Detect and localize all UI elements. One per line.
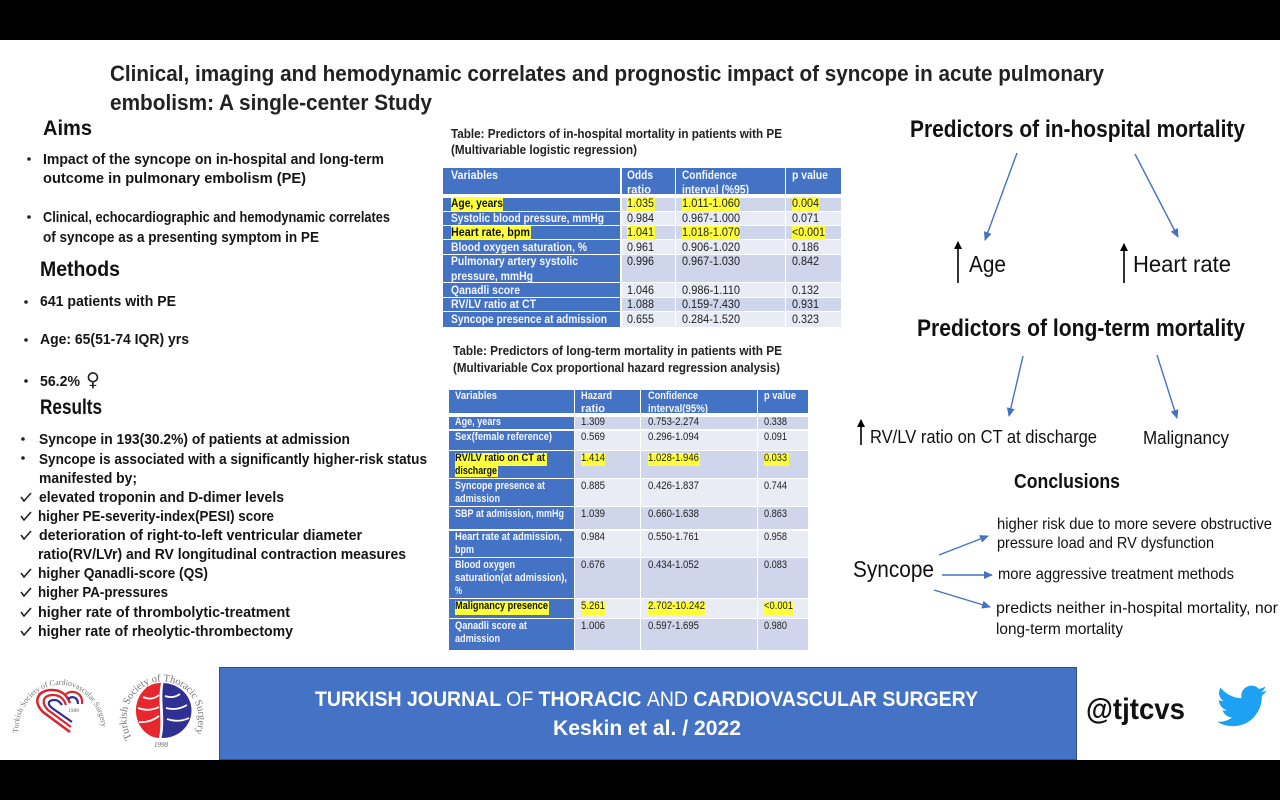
- aims bullets: Impact of the syncope on in-hospital and long-term: [43, 151, 384, 168]
- table 1 variable column: Qanadli score: [451, 283, 520, 297]
- table 2 variable column: Syncope presence at: [455, 480, 545, 492]
- table 2 variable column: saturation(at admission),: [455, 572, 567, 584]
- results checklist: elevated troponin and D-dimer levels: [39, 489, 284, 506]
- results checklist: ratio(RV/LVr) and RV longitudinal contraction measures: [38, 546, 406, 563]
- table 1 values: 1.041: [627, 225, 654, 239]
- table 2 values: 1.039: [581, 508, 605, 520]
- table 2 values: 0.660-1.638: [648, 508, 699, 520]
- results checklist: [21, 489, 406, 640]
- label: heart rate: Heart rate: [1133, 251, 1231, 277]
- table 2 values: 0.597-1.695: [648, 620, 699, 632]
- table 1 variable column: Systolic blood pressure, mmHg: [451, 211, 604, 225]
- table 2 values: 0.083: [764, 559, 787, 571]
- heading: long-term predictors: Predictors of long-term mortality: [917, 315, 1246, 342]
- panel: methods: [24, 258, 189, 391]
- journal name: TURKISH JOURNAL OF THORACIC AND CARDIOVASCULAR SURGERY: [315, 688, 978, 711]
- panel: predictors of long-term mortality: [861, 315, 1246, 448]
- table 2 values: 1.309: [581, 416, 605, 428]
- table 1 header row: interval (%95): [682, 182, 749, 196]
- table 1 values: 0.159-7.430: [682, 297, 740, 311]
- table: in-hospital mortality: [443, 168, 841, 327]
- table 2 variable column: discharge: [455, 465, 497, 477]
- table 1 variable column: Age, years: [451, 196, 503, 210]
- table caption: long-term mortality: [453, 344, 782, 375]
- table 2 values: 0.980: [764, 620, 787, 632]
- table 2 values: 0.338: [764, 416, 787, 428]
- title: Clinical, imaging and hemodynamic correlates and prognostic impact of syncope in acute pulmonary: [110, 61, 1105, 86]
- table 2 variable column: %: [455, 585, 462, 597]
- arrow: higher risk: [939, 536, 988, 555]
- arrow: aggressive treatment: [942, 574, 992, 576]
- table 2 values: [581, 416, 793, 632]
- table 2 variable column: Malignancy presence: [455, 600, 548, 612]
- table 2 values: 0.569: [581, 431, 605, 443]
- table 1 values: <0.001: [792, 225, 825, 239]
- aims bullets: [27, 151, 390, 246]
- table 2 header row: Variables: [455, 390, 497, 402]
- table 2 values: 0.984: [581, 531, 605, 543]
- table 2 values: 1.006: [581, 620, 605, 632]
- panel: predictors of in-hospital mortality: [910, 116, 1246, 283]
- table 1 values: 0.284-1.520: [682, 312, 740, 326]
- table caption: in-hospital mortality: [451, 127, 782, 157]
- logo: Turkish Society of Thoracic Surgery: Turkish Society of Thoracic Surgery: [120, 674, 204, 742]
- heading: results: Results: [40, 396, 102, 419]
- table caption: in-hospital mortality: (Multivariable logistic regression): [451, 143, 637, 157]
- table 2 values: 1.028-1.946: [648, 452, 699, 464]
- footer banner: [220, 668, 1076, 760]
- table 2 variable column: Sex(female reference): [455, 431, 552, 443]
- table 1 values: 1.046: [627, 283, 654, 297]
- table 2 variable column: Age, years: [455, 416, 501, 428]
- arrow: to rv/lv ratio: [1009, 356, 1023, 416]
- conclusion: no mortality prediction: long-term mortality: [996, 621, 1123, 638]
- panel: aims: [27, 117, 390, 246]
- up arrow: heart rate: [1123, 244, 1125, 283]
- table caption: long-term mortality: (Multivariable Cox proportional hazard regression analysis): [453, 361, 780, 375]
- up arrow: age: [957, 242, 959, 283]
- panel: conclusions: [853, 471, 1279, 638]
- table 2 header row: Confidence: [648, 390, 698, 402]
- conclusion: higher risk: pressure load and RV dysfunction: [997, 535, 1214, 552]
- table 2 values: 1.414: [581, 452, 605, 464]
- logo: Turkish Society of Cardiovascular Surgery: Turkish Society of Cardiovascular Surgery: [12, 679, 106, 733]
- table 2 values: 0.885: [581, 480, 605, 492]
- table 1 values: 1.011-1.060: [682, 196, 740, 210]
- table 2 values: 0.753-2.274: [648, 416, 699, 428]
- table 1 values: 0.961: [627, 240, 654, 254]
- table 2 values: 0.426-1.837: [648, 480, 699, 492]
- methods bullets: 56.2%: [40, 373, 80, 390]
- table 1 variable column: Blood oxygen saturation, %: [451, 240, 587, 254]
- results checklist: higher PE-severity-index(PESI) score: [38, 508, 274, 525]
- table 2 values: <0.001: [764, 600, 793, 612]
- table 1 variable column: RV/LV ratio at CT: [451, 297, 537, 311]
- table 2 values: 0.863: [764, 508, 787, 520]
- table 1 values: 1.018-1.070: [682, 225, 740, 239]
- table: long-term mortality: [449, 390, 808, 650]
- arrow: to malignancy: [1157, 355, 1177, 418]
- table 2 values: 0.744: [764, 480, 787, 492]
- table 1 values: 1.035: [627, 196, 654, 210]
- results bullets: [21, 431, 427, 487]
- methods bullets: Age: 65(51-74 IQR) yrs: [40, 331, 189, 348]
- table 2 values: 0.434-1.052: [648, 559, 699, 571]
- label: age: Age: [969, 251, 1006, 277]
- panel: results: [21, 396, 427, 640]
- table 1 values: 0.967-1.030: [682, 254, 740, 268]
- label: malignancy: Malignancy: [1143, 428, 1229, 448]
- table 2 header row: Hazard: [581, 390, 612, 402]
- table 2 header row: interval(95%): [648, 403, 708, 415]
- table 2 values: 5.261: [581, 600, 605, 612]
- label: syncope: Syncope: [853, 556, 934, 582]
- conclusion: no mortality prediction: predicts neither in-hospital mortality, nor: [996, 600, 1279, 617]
- table 1 values: 0.071: [792, 211, 819, 225]
- conclusion: aggressive treatment: more aggressive treatment methods: [998, 566, 1234, 583]
- table 2 values: 2.702-10.242: [648, 600, 705, 612]
- results checklist: higher Qanadli-score (QS): [38, 565, 208, 582]
- methods bullets: [24, 293, 189, 391]
- table 1 values: [627, 196, 825, 326]
- logo: Turkish Society of Cardiovascular Surgery: 1988: [68, 708, 79, 714]
- arrow: to heart rate: [1135, 154, 1178, 237]
- table 2 variable column: Blood oxygen: [455, 559, 515, 571]
- top black bar: [0, 0, 1280, 40]
- table 1 values: 0.004: [792, 196, 819, 210]
- table 2 values: 0.296-1.094: [648, 431, 699, 443]
- table 1 values: 0.842: [792, 254, 819, 268]
- results checklist: higher PA-pressures: [38, 584, 168, 601]
- table caption: in-hospital mortality: Table: Predictors of in-hospital mortality in patients with PE: [451, 127, 782, 141]
- twitter handle: @tjtcvs: [1086, 693, 1185, 726]
- table 1 values: 0.931: [792, 297, 819, 311]
- aims bullets: Clinical, echocardiographic and hemodynamic correlates: [43, 209, 390, 226]
- table 1 values: 0.996: [627, 254, 654, 268]
- table 2 values: 0.550-1.761: [648, 531, 699, 543]
- bottom black bar: [0, 760, 1280, 800]
- table 2 variable column: bpm: [455, 544, 474, 556]
- table 2 background cells: [449, 390, 808, 650]
- table 2 header row: [455, 390, 796, 415]
- table 2 values: 0.091: [764, 431, 787, 443]
- label: rv/lv ratio: RV/LV ratio on CT at discharge: [870, 427, 1097, 447]
- methods bullets: 641 patients with PE: [40, 293, 176, 310]
- table 1 header row: [451, 168, 828, 196]
- aims bullets: outcome in pulmonary embolism (PE): [43, 170, 306, 187]
- table 1 header row: Confidence: [682, 168, 737, 182]
- conclusion: no mortality prediction: [996, 600, 1279, 638]
- table 1 values: 0.186: [792, 240, 819, 254]
- table 2 variable column: admission: [455, 633, 500, 645]
- table 2 header row: ratio: [581, 403, 605, 415]
- table caption: long-term mortality: Table: Predictors of long-term mortality in patients with PE: [453, 344, 782, 358]
- table 1 values: 0.986-1.110: [682, 283, 740, 297]
- table 1 variable column: pressure, mmHg: [451, 269, 533, 283]
- table 1 values: 1.088: [627, 297, 654, 311]
- table 1 values: 0.323: [792, 312, 819, 326]
- heading: methods: Methods: [40, 258, 120, 281]
- table 2 variable column: SBP at admission, mmHg: [455, 508, 564, 520]
- results bullets: Syncope is associated with a significantly higher-risk status: [39, 451, 427, 468]
- table 2 variable column: admission: [455, 493, 500, 505]
- table 1 variable column: Syncope presence at admission: [451, 312, 607, 326]
- table 1 background cells: [443, 168, 841, 327]
- results bullets: Syncope in 193(30.2%) of patients at admission: [39, 431, 350, 448]
- table 2 variable column: Qanadli score at: [455, 620, 527, 632]
- arrow: to age: [985, 153, 1017, 240]
- title: [110, 61, 1105, 115]
- methods bullets: ♀: [86, 369, 100, 391]
- aims bullets: of syncope as a presenting symptom in PE: [43, 229, 319, 246]
- conclusion: higher risk: [997, 516, 1272, 552]
- table 1 values: 0.967-1.000: [682, 211, 740, 225]
- table 1 values: 0.906-1.020: [682, 240, 740, 254]
- up arrow: rv/lv ratio: [860, 420, 862, 445]
- results checklist: deterioration of right-to-left ventricular diameter: [39, 527, 362, 544]
- table 1 header row: Variables: [451, 168, 498, 182]
- table 2 header row: p value: [764, 390, 796, 402]
- table 2 values: 0.033: [764, 452, 787, 464]
- icon: twitter bird: [1217, 686, 1267, 726]
- results checklist: higher rate of rheolytic-thrombectomy: [38, 623, 294, 640]
- table 1 header row: Odds: [627, 168, 653, 182]
- table 2 variable column: RV/LV ratio on CT at: [455, 452, 545, 464]
- table 1 values: 0.655: [627, 312, 654, 326]
- table 2 variable column: Heart rate at admission,: [455, 531, 562, 543]
- table 1 header row: ratio: [627, 182, 651, 196]
- table 2 variable column: [455, 416, 567, 645]
- logo: Turkish Society of Thoracic Surgery: 1998: [154, 741, 168, 749]
- heading: aims: Aims: [43, 117, 92, 140]
- citation: Keskin et al. / 2022: [553, 717, 741, 740]
- results bullets: manifested by;: [39, 470, 137, 487]
- heading: conclusions: Conclusions: [1014, 471, 1120, 493]
- table 1 variable column: Heart rate, bpm: [451, 225, 530, 239]
- arrow: no mortality prediction: [934, 590, 990, 607]
- table 1 values: 0.984: [627, 211, 654, 225]
- table 1 header row: p value: [792, 168, 828, 182]
- title: embolism: A single-center Study: [110, 90, 433, 115]
- results checklist: higher rate of thrombolytic-treatment: [38, 604, 290, 621]
- table 2 values: 0.958: [764, 531, 787, 543]
- table 2 values: 0.676: [581, 559, 605, 571]
- table 1 values: 0.132: [792, 283, 819, 297]
- table 1 variable column: [451, 196, 607, 326]
- table 1 variable column: Pulmonary artery systolic: [451, 254, 578, 268]
